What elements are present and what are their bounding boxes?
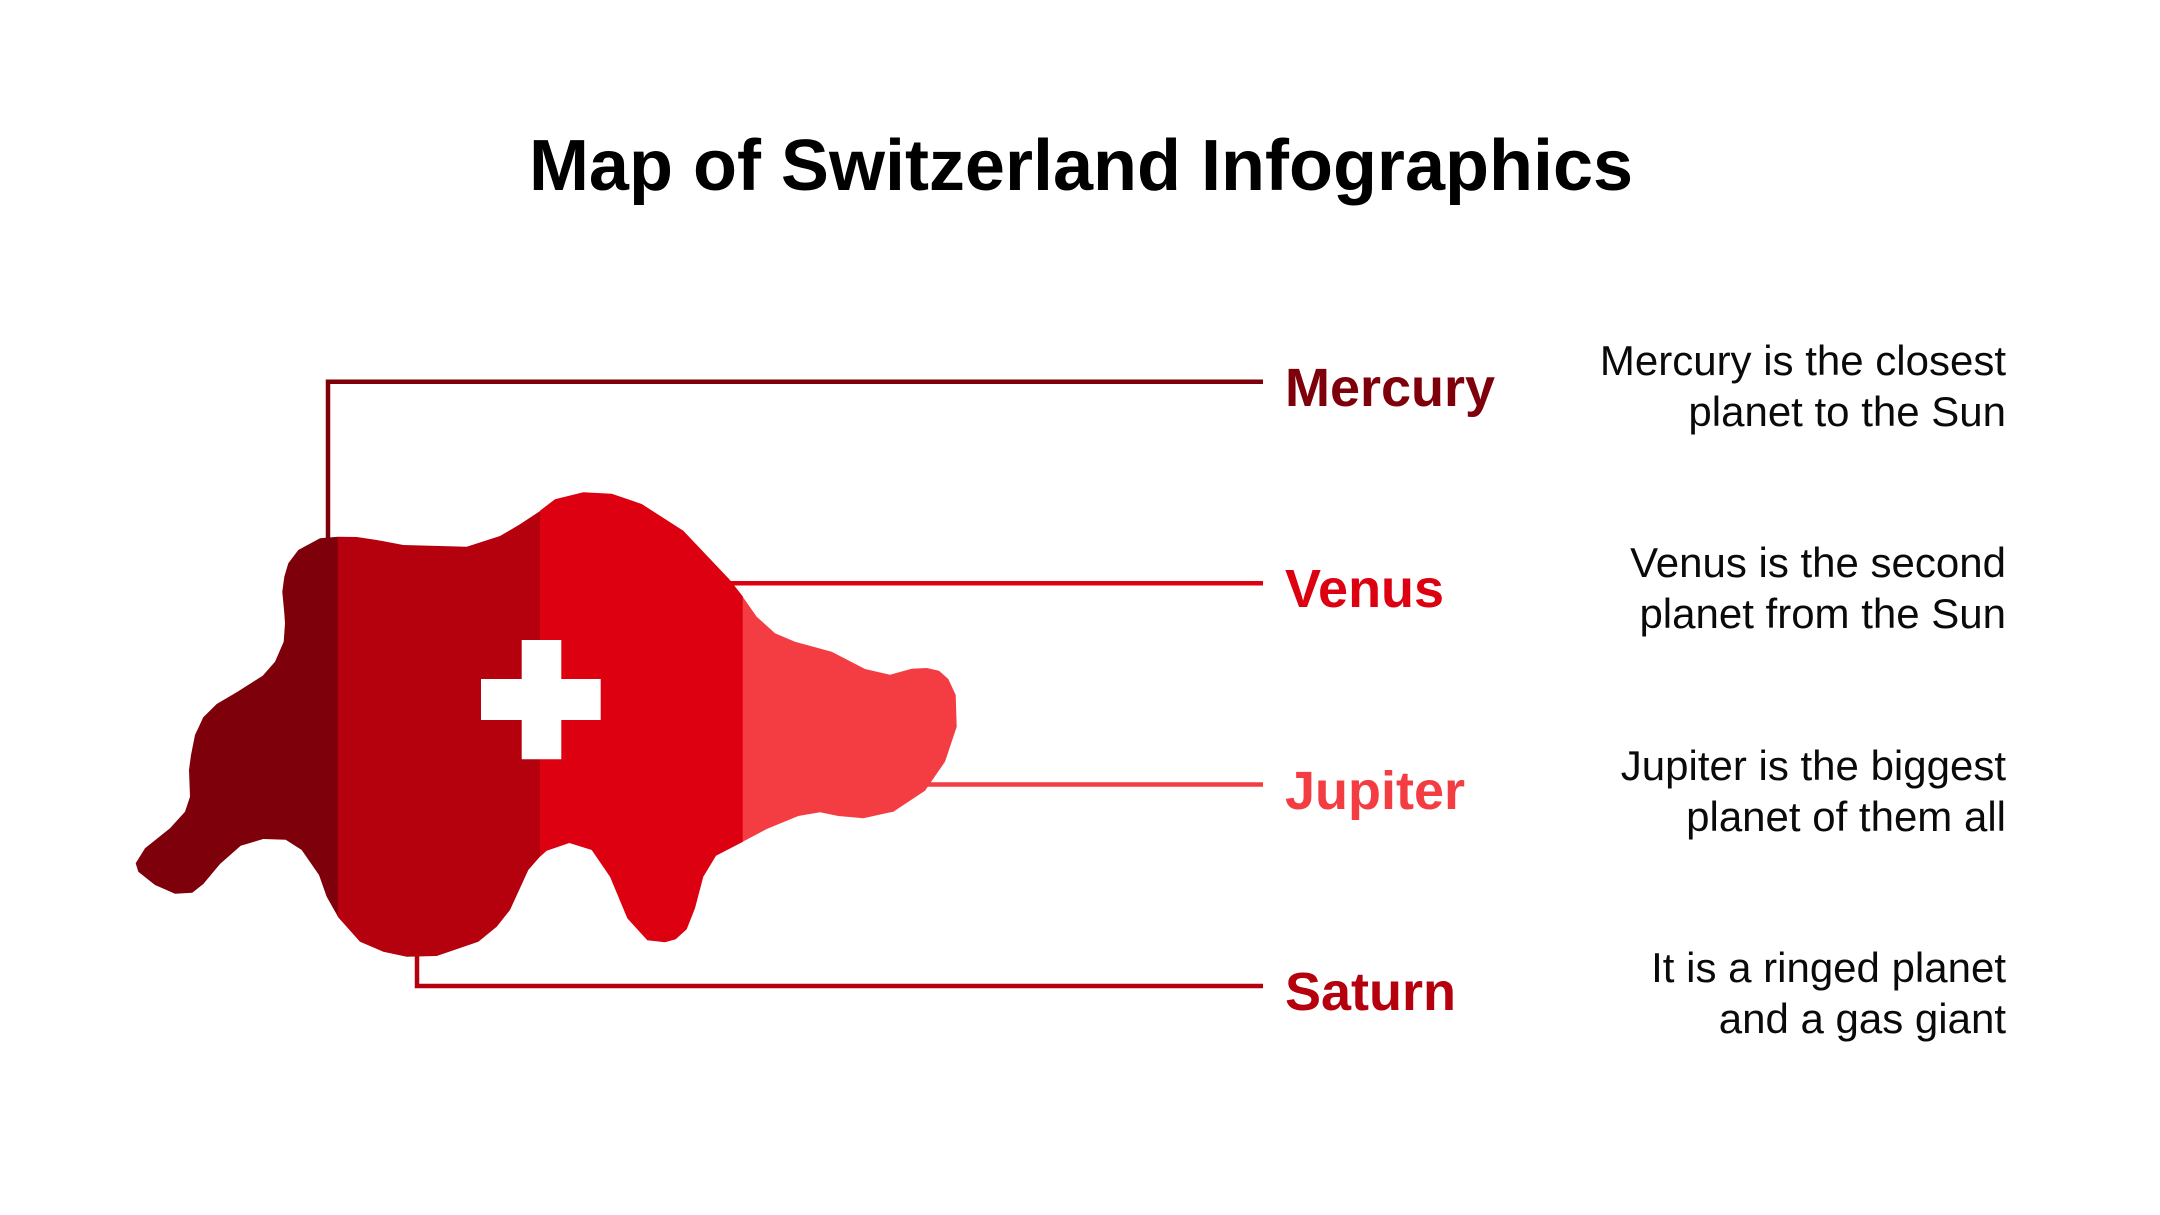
item: Jupiter [1285,742,2006,840]
connector: Saturn [417,950,1263,986]
description: Mercury: planet to the Sun [1688,388,2006,435]
description: Jupiter: planet of them all [1686,793,2006,840]
heading: Saturn: Saturn [1285,962,1456,1022]
description: Venus: Venus is the second [1630,539,2006,586]
connector: Jupiter [920,782,1263,787]
map region: Mercury [136,537,338,917]
description: Venus: planet from the Sun [1639,590,2006,637]
item: Mercury [1285,337,2006,435]
description: Mercury: Mercury is the closest [1600,337,2006,384]
description: Saturn: and a gas giant [1719,995,2006,1042]
heading: Venus: Venus [1285,559,1444,619]
map region: Jupiter [743,597,957,842]
map of Switzerland [136,492,957,957]
item: Venus [1285,539,2006,637]
connector: Venus [725,581,1263,586]
icon: white Swiss cross [481,640,601,759]
map region: Venus [540,492,743,942]
description: Jupiter: Jupiter is the biggest [1621,742,2006,789]
map region: Saturn [338,511,540,957]
heading: Jupiter: Jupiter [1285,761,1465,821]
connector: Mercury [328,382,1263,545]
item: Saturn [1285,944,2006,1042]
heading: Mercury: Mercury [1285,358,1495,418]
description: Saturn: It is a ringed planet [1651,944,2006,991]
title: Map of Switzerland Infographics [529,126,1633,206]
